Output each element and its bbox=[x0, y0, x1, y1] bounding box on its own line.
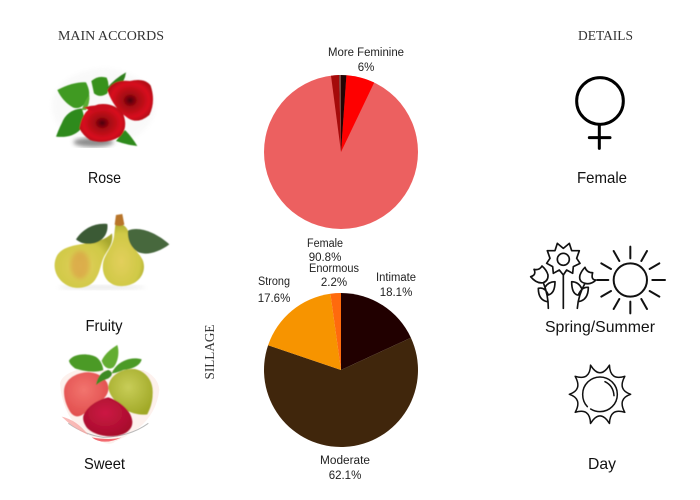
icon: day sun bbox=[569, 365, 631, 423]
icon: sun bbox=[597, 247, 665, 313]
label: fruity: Fruity bbox=[86, 318, 122, 335]
label: female: Female bbox=[577, 170, 627, 187]
chart label: intimate bbox=[376, 272, 416, 299]
chart label: enormous: Enormous bbox=[309, 263, 359, 275]
chart label: more feminine bbox=[328, 47, 404, 74]
icon: female symbol bbox=[577, 78, 623, 148]
chart label: strong bbox=[258, 276, 290, 305]
label: sweet: Sweet bbox=[84, 456, 126, 473]
image: roses bbox=[52, 68, 155, 147]
chart label: female: 90.8% bbox=[309, 252, 341, 264]
chart label: more feminine: More Feminine bbox=[328, 47, 404, 59]
chart label: enormous bbox=[309, 263, 359, 289]
pie chart: gender bbox=[264, 75, 418, 229]
chart label: intimate: Intimate bbox=[376, 272, 416, 284]
image: pears bbox=[55, 214, 169, 290]
chart label: female: Female bbox=[307, 238, 343, 250]
chart label: moderate: 62.1% bbox=[329, 470, 361, 482]
image: sorbet cup bbox=[60, 345, 159, 444]
chart label: more feminine: 6% bbox=[358, 62, 374, 74]
axis label: sillage: SILLAGE bbox=[203, 324, 218, 380]
chart label: strong: 17.6% bbox=[258, 293, 290, 305]
chart label: intimate: 18.1% bbox=[380, 287, 412, 299]
heading: details: DETAILS bbox=[578, 29, 633, 44]
chart label: strong: Strong bbox=[258, 276, 290, 288]
heading: main accords: MAIN ACCORDS bbox=[58, 29, 164, 44]
chart label: moderate bbox=[320, 455, 370, 482]
label: spring/summer: Spring/Summer bbox=[545, 319, 656, 336]
label: rose: Rose bbox=[88, 170, 121, 187]
chart label: enormous: 2.2% bbox=[321, 277, 347, 289]
chart label: moderate: Moderate bbox=[320, 455, 370, 467]
chart label: female bbox=[307, 238, 343, 264]
pie chart: sillage bbox=[264, 293, 418, 447]
label: day: Day bbox=[588, 456, 616, 473]
icon: flowers bbox=[531, 243, 596, 308]
